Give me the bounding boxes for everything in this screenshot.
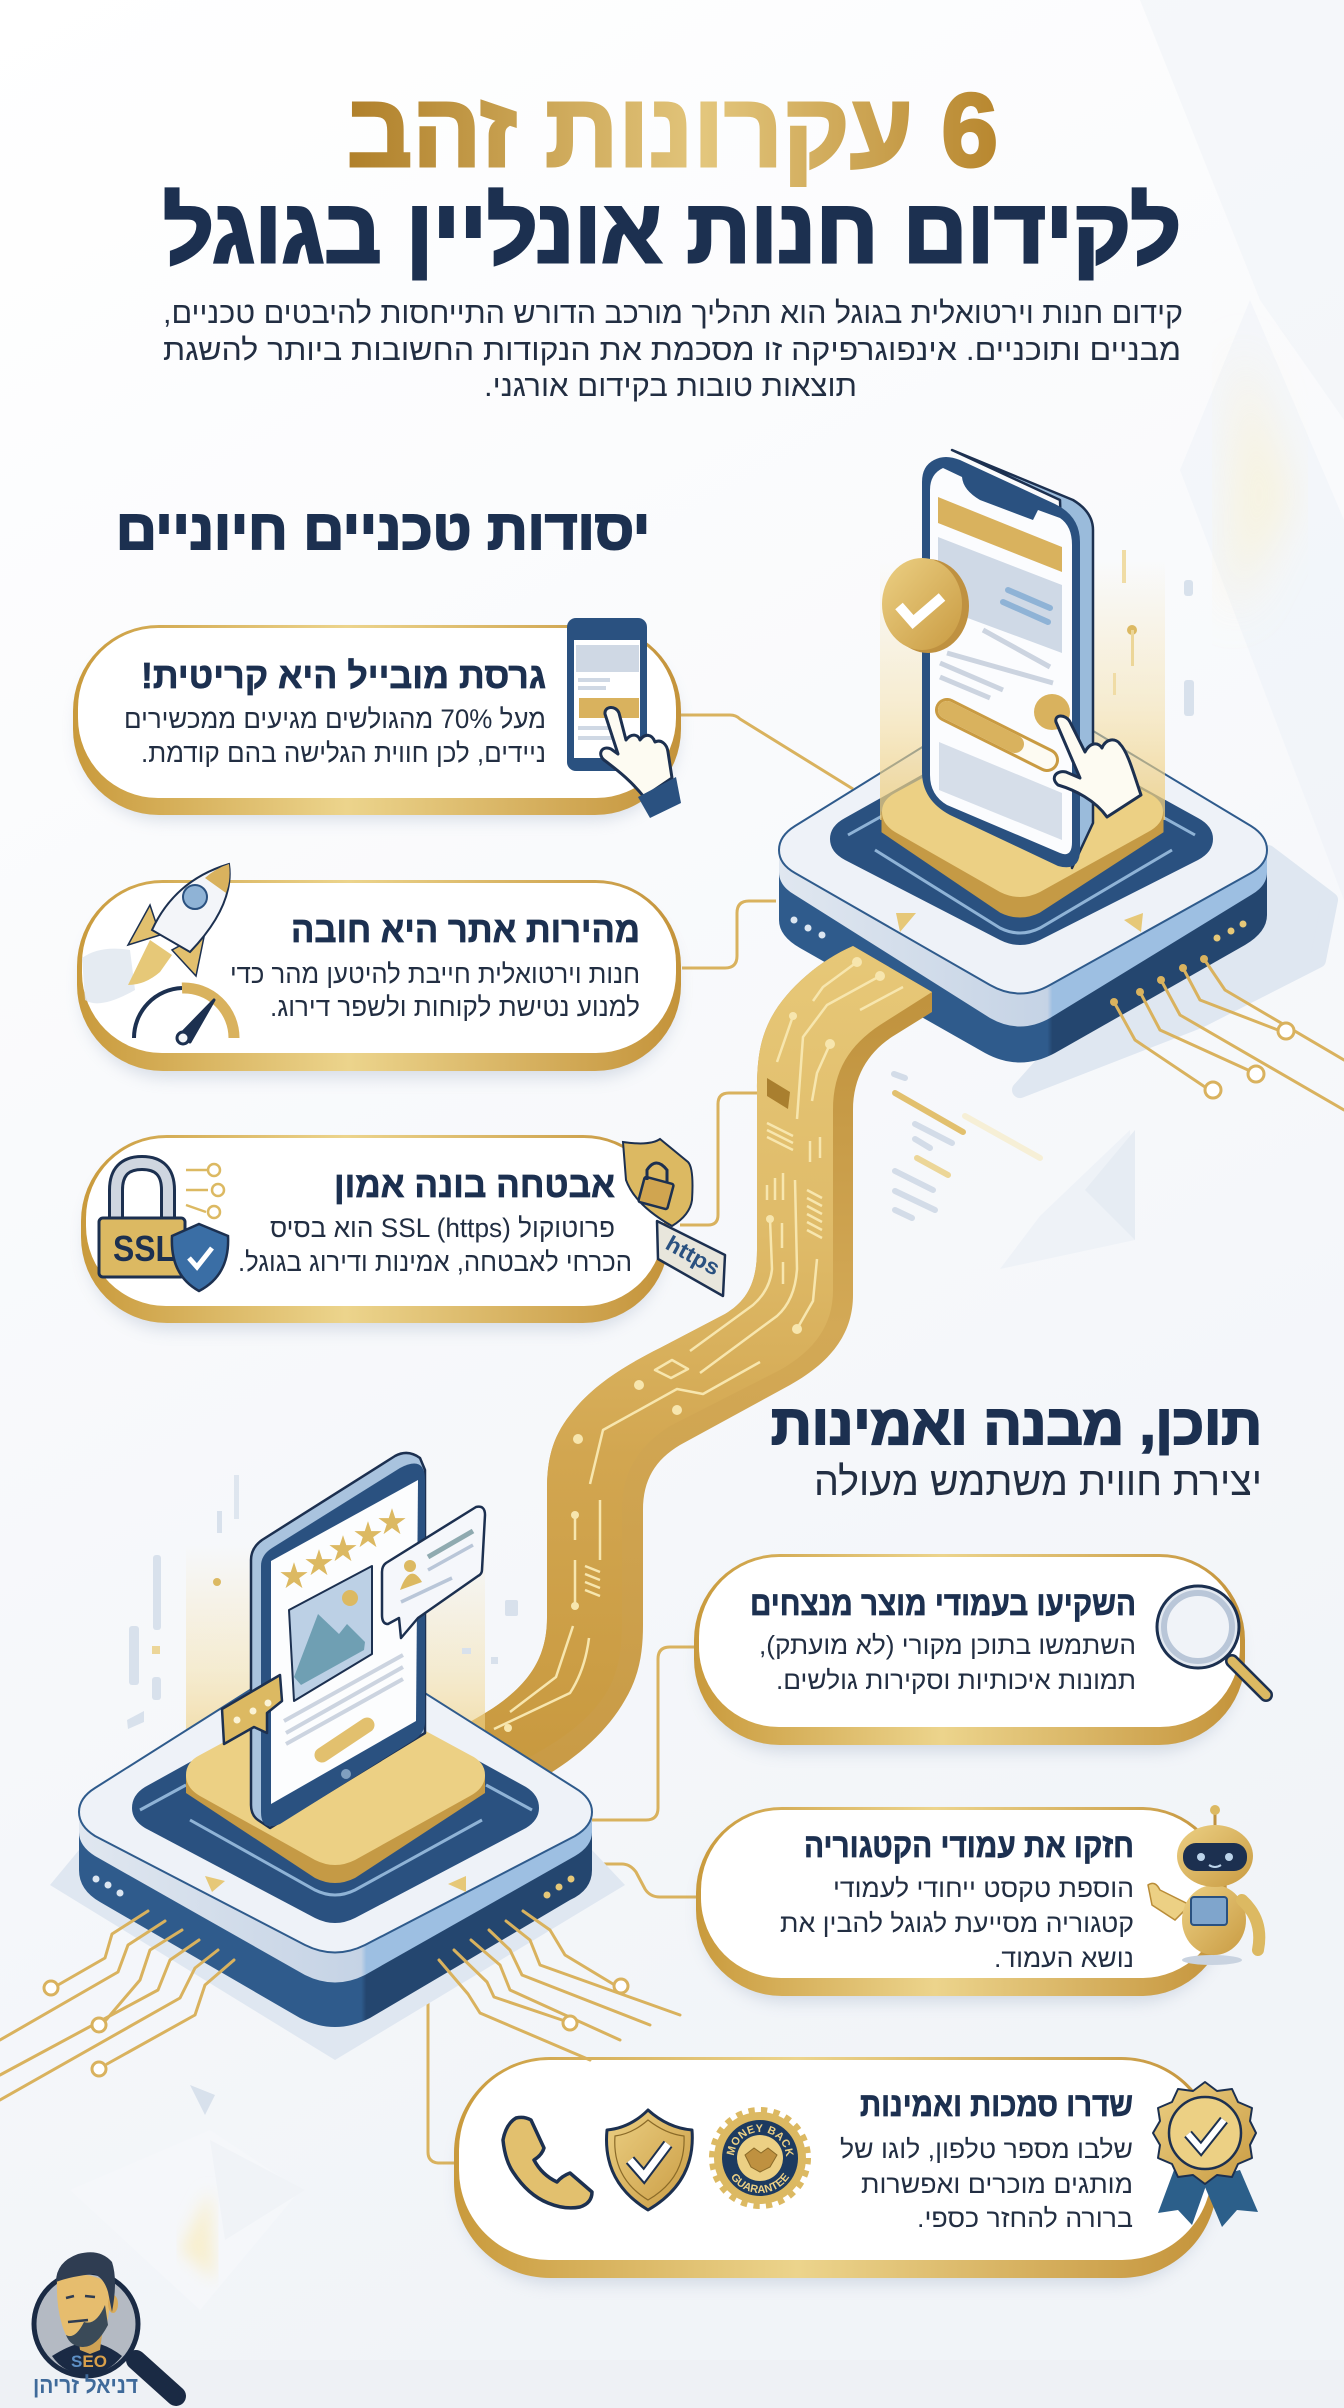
body bbox=[79, 1812, 592, 2027]
icon: speed gauge bbox=[134, 988, 234, 1044]
card 2 text bbox=[230, 959, 640, 1022]
SEO label: SEO bbox=[71, 2352, 107, 2371]
rating stars: ★ bbox=[377, 1507, 407, 1539]
gold base 1 bbox=[882, 729, 1163, 917]
card 5 text: נושא העמוד. bbox=[994, 1943, 1134, 1973]
intro paragraph: מבניים ותוכניים. אינפוגרפיקה זו מסכמת את הנקודות החשובות ביותר להשגת bbox=[163, 334, 1181, 367]
card 2 text: למנוע נטישת לקוחות ולשפר דירוג. bbox=[270, 992, 640, 1022]
connector lines bbox=[428, 715, 853, 2163]
golden circuit ribbon bbox=[465, 946, 932, 1790]
title line gold: 6 עקרונות זהב bbox=[347, 73, 998, 189]
card 1 text: ניידים, לכן חווית הגלישה בהם קודמת. bbox=[141, 738, 546, 768]
buy button bbox=[322, 1725, 367, 1755]
platform 2 bbox=[0, 1645, 680, 2100]
card 6: authority and trust bbox=[454, 2057, 1258, 2289]
card 3 heading: אבטחה בונה אמון bbox=[334, 1164, 615, 1205]
home button bbox=[341, 1769, 351, 1779]
rating stars bbox=[279, 1507, 407, 1593]
rating stars: ★ bbox=[279, 1561, 309, 1593]
phone illustration bbox=[882, 450, 1141, 868]
top surface bbox=[79, 1645, 592, 1952]
card 5: category pages bbox=[696, 1805, 1259, 2002]
ribbon circuit lines bbox=[494, 962, 903, 1729]
icon: SSL lock: SSL bbox=[113, 1228, 175, 1269]
card 6 text: מותגים מוכרים ואפשרות bbox=[861, 2169, 1133, 2199]
section heading: content, structure, trust bbox=[771, 1393, 1262, 1504]
beard bbox=[66, 2305, 108, 2347]
review bubble bbox=[382, 1507, 485, 1638]
status dots left bbox=[790, 916, 826, 938]
description lines bbox=[284, 1655, 403, 1744]
ribbon nodes bbox=[504, 957, 885, 1732]
phone front bbox=[922, 457, 1080, 867]
card 5 heading: חזקו את עמודי הקטגוריה bbox=[804, 1827, 1134, 1865]
status dots bbox=[92, 1876, 124, 1896]
subheading: יצירת חווית משתמש מעולה bbox=[814, 1460, 1262, 1504]
ribbon chip bbox=[767, 1078, 790, 1109]
floating decorative chips bbox=[1113, 550, 1194, 716]
card 3 text: פרוטוקול SSL (https) הוא בסיס bbox=[270, 1213, 615, 1243]
tablet body bbox=[261, 1464, 425, 1826]
icon: mobile tap bbox=[567, 618, 681, 818]
card 4 text: תמונות איכותיות וסקירות גולשים. bbox=[776, 1665, 1136, 1695]
phone side bbox=[952, 450, 1093, 868]
hair bbox=[56, 2252, 115, 2312]
icon: telephone bbox=[503, 2117, 592, 2208]
product image bbox=[289, 1566, 372, 1701]
header bar bbox=[938, 497, 1062, 572]
circuit traces bbox=[0, 1911, 680, 2100]
platform inner recess bbox=[830, 724, 1213, 945]
icon: SSL lock bbox=[99, 1163, 228, 1291]
lower card bbox=[939, 742, 1062, 840]
card 5 text bbox=[780, 1873, 1134, 1973]
card 1 heading: גרסת מובייל היא קריטית! bbox=[141, 655, 546, 696]
arrow markers bbox=[205, 1876, 225, 1892]
author logo bbox=[33, 2252, 176, 2398]
title line navy: לקידום חנות אונליין בגוגל bbox=[163, 182, 1181, 282]
icon: gold lock shield bbox=[623, 1139, 692, 1226]
platform 1 body bbox=[779, 850, 1267, 1062]
rating stars: ★ bbox=[328, 1534, 358, 1566]
icon: connection nodes bbox=[186, 1164, 224, 1218]
icon: award badge bbox=[1153, 2082, 1258, 2227]
card 4 text bbox=[759, 1630, 1136, 1695]
icon: https tag bbox=[657, 1221, 725, 1296]
platform 2 shadow bbox=[50, 1850, 625, 2060]
card 5 text: קטגוריה מסייעת לגוגל להבין את bbox=[780, 1908, 1134, 1938]
platform 1 shadow bbox=[1020, 853, 1330, 1090]
circuit traces bbox=[1114, 959, 1344, 1110]
icon: https tag: https bbox=[662, 1231, 724, 1280]
card 6 text: שלבו מספר טלפון, לוגו של bbox=[840, 2134, 1133, 2164]
intro paragraph: קידום חנות וירטואלית בגוגל הוא תהליך מורכב הדורש התייחסות להיבטים טכניים, bbox=[163, 297, 1183, 330]
neck bbox=[78, 2335, 102, 2354]
icon: robot bbox=[1148, 1805, 1259, 1965]
image card bbox=[938, 537, 1062, 653]
card 3 text: הכרחי לאבטחה, אמינות ודירוג בגוגל. bbox=[238, 1247, 632, 1277]
section heading: technical foundations: יסודות טכניים חיוניים bbox=[116, 498, 650, 561]
card 1 text: מעל 70% מהגולשים מגיעים ממכשירים bbox=[124, 704, 546, 734]
tablet edge bbox=[251, 1453, 425, 1828]
floating chips beside tablet bbox=[127, 1475, 518, 2115]
rating stars: ★ bbox=[304, 1548, 334, 1580]
icon: money back guarantee seal: GUARANTEE bbox=[732, 2172, 790, 2194]
tablet screen bbox=[271, 1480, 418, 1804]
chat bubble bbox=[222, 1675, 282, 1744]
beam of light 1 bbox=[880, 560, 1165, 820]
card 1: mobile version bbox=[73, 618, 681, 820]
icon: money back guarantee seal: MONEY BACK bbox=[726, 2124, 794, 2157]
eyes and mouth bbox=[66, 2296, 95, 2322]
tap circle bbox=[1034, 694, 1070, 730]
author name: דניאל זריהן bbox=[33, 2372, 138, 2398]
card 4: product pages bbox=[694, 1554, 1266, 1752]
icon: blue check shield bbox=[172, 1224, 228, 1291]
card 5 text: הוספת טקסט ייחודי לעמודי bbox=[833, 1873, 1134, 1903]
side band bbox=[79, 1812, 592, 1982]
tablet illustration bbox=[222, 1453, 485, 1828]
platform top surface bbox=[779, 695, 1267, 994]
check coin bbox=[882, 558, 969, 653]
icon: gold check shield bbox=[607, 2110, 692, 2210]
platform side band bbox=[779, 850, 1267, 1026]
icon: magnifier bbox=[1157, 1586, 1266, 1695]
icon: money back guarantee seal bbox=[709, 2107, 811, 2209]
card 4 heading: השקיעו בעמודי מוצר מנצחים bbox=[750, 1585, 1136, 1623]
text lines bbox=[940, 630, 1053, 698]
ear bbox=[108, 2295, 118, 2313]
card 2 text: חנות וירטואלית חייבת להיטען מהר כדי bbox=[230, 959, 640, 989]
face bbox=[57, 2275, 109, 2347]
card 2: site speed bbox=[77, 864, 681, 1078]
beam of light 2 bbox=[186, 1545, 485, 1775]
pointing hand bbox=[1054, 716, 1141, 817]
data chips under platform bbox=[894, 1074, 1040, 1218]
arrow markers bbox=[896, 913, 916, 932]
ribbon diamond bbox=[655, 1360, 688, 1378]
intro paragraph bbox=[163, 297, 1183, 403]
rating stars: ★ bbox=[353, 1520, 383, 1552]
card 3 text bbox=[238, 1213, 632, 1277]
title bbox=[163, 73, 1181, 282]
card 6 heading: שדרו סמכות ואמינות bbox=[860, 2086, 1133, 2124]
ribbon stripe blocks bbox=[585, 1123, 822, 1596]
card 1 text bbox=[124, 704, 546, 768]
inner recess bbox=[132, 1686, 539, 1923]
gold button bbox=[947, 710, 1047, 760]
section heading: content, structure, trust: תוכן, מבנה ואמינות bbox=[771, 1393, 1262, 1456]
platform 1 bbox=[779, 695, 1344, 1110]
gold base 2 bbox=[186, 1686, 485, 1883]
icon: rocket bbox=[82, 864, 230, 1003]
avatar circle bbox=[34, 2272, 138, 2376]
card 6 text bbox=[840, 2134, 1133, 2233]
status dots right bbox=[1214, 920, 1246, 942]
shirt bbox=[52, 2344, 122, 2374]
card 4 text: השתמשו בתוכן מקורי (לא מועתק), bbox=[759, 1630, 1136, 1660]
card 3: security bbox=[81, 1135, 725, 1330]
blue lines bbox=[1003, 590, 1050, 622]
card 6 text: ברורה להחזר כספי. bbox=[917, 2203, 1133, 2233]
phone screen bbox=[930, 468, 1072, 854]
magnifier handle bbox=[136, 2360, 176, 2396]
intro paragraph: תוצאות טובות בקידום אורגני. bbox=[484, 370, 857, 403]
card 2 heading: מהירות אתר היא חובה bbox=[291, 909, 640, 950]
